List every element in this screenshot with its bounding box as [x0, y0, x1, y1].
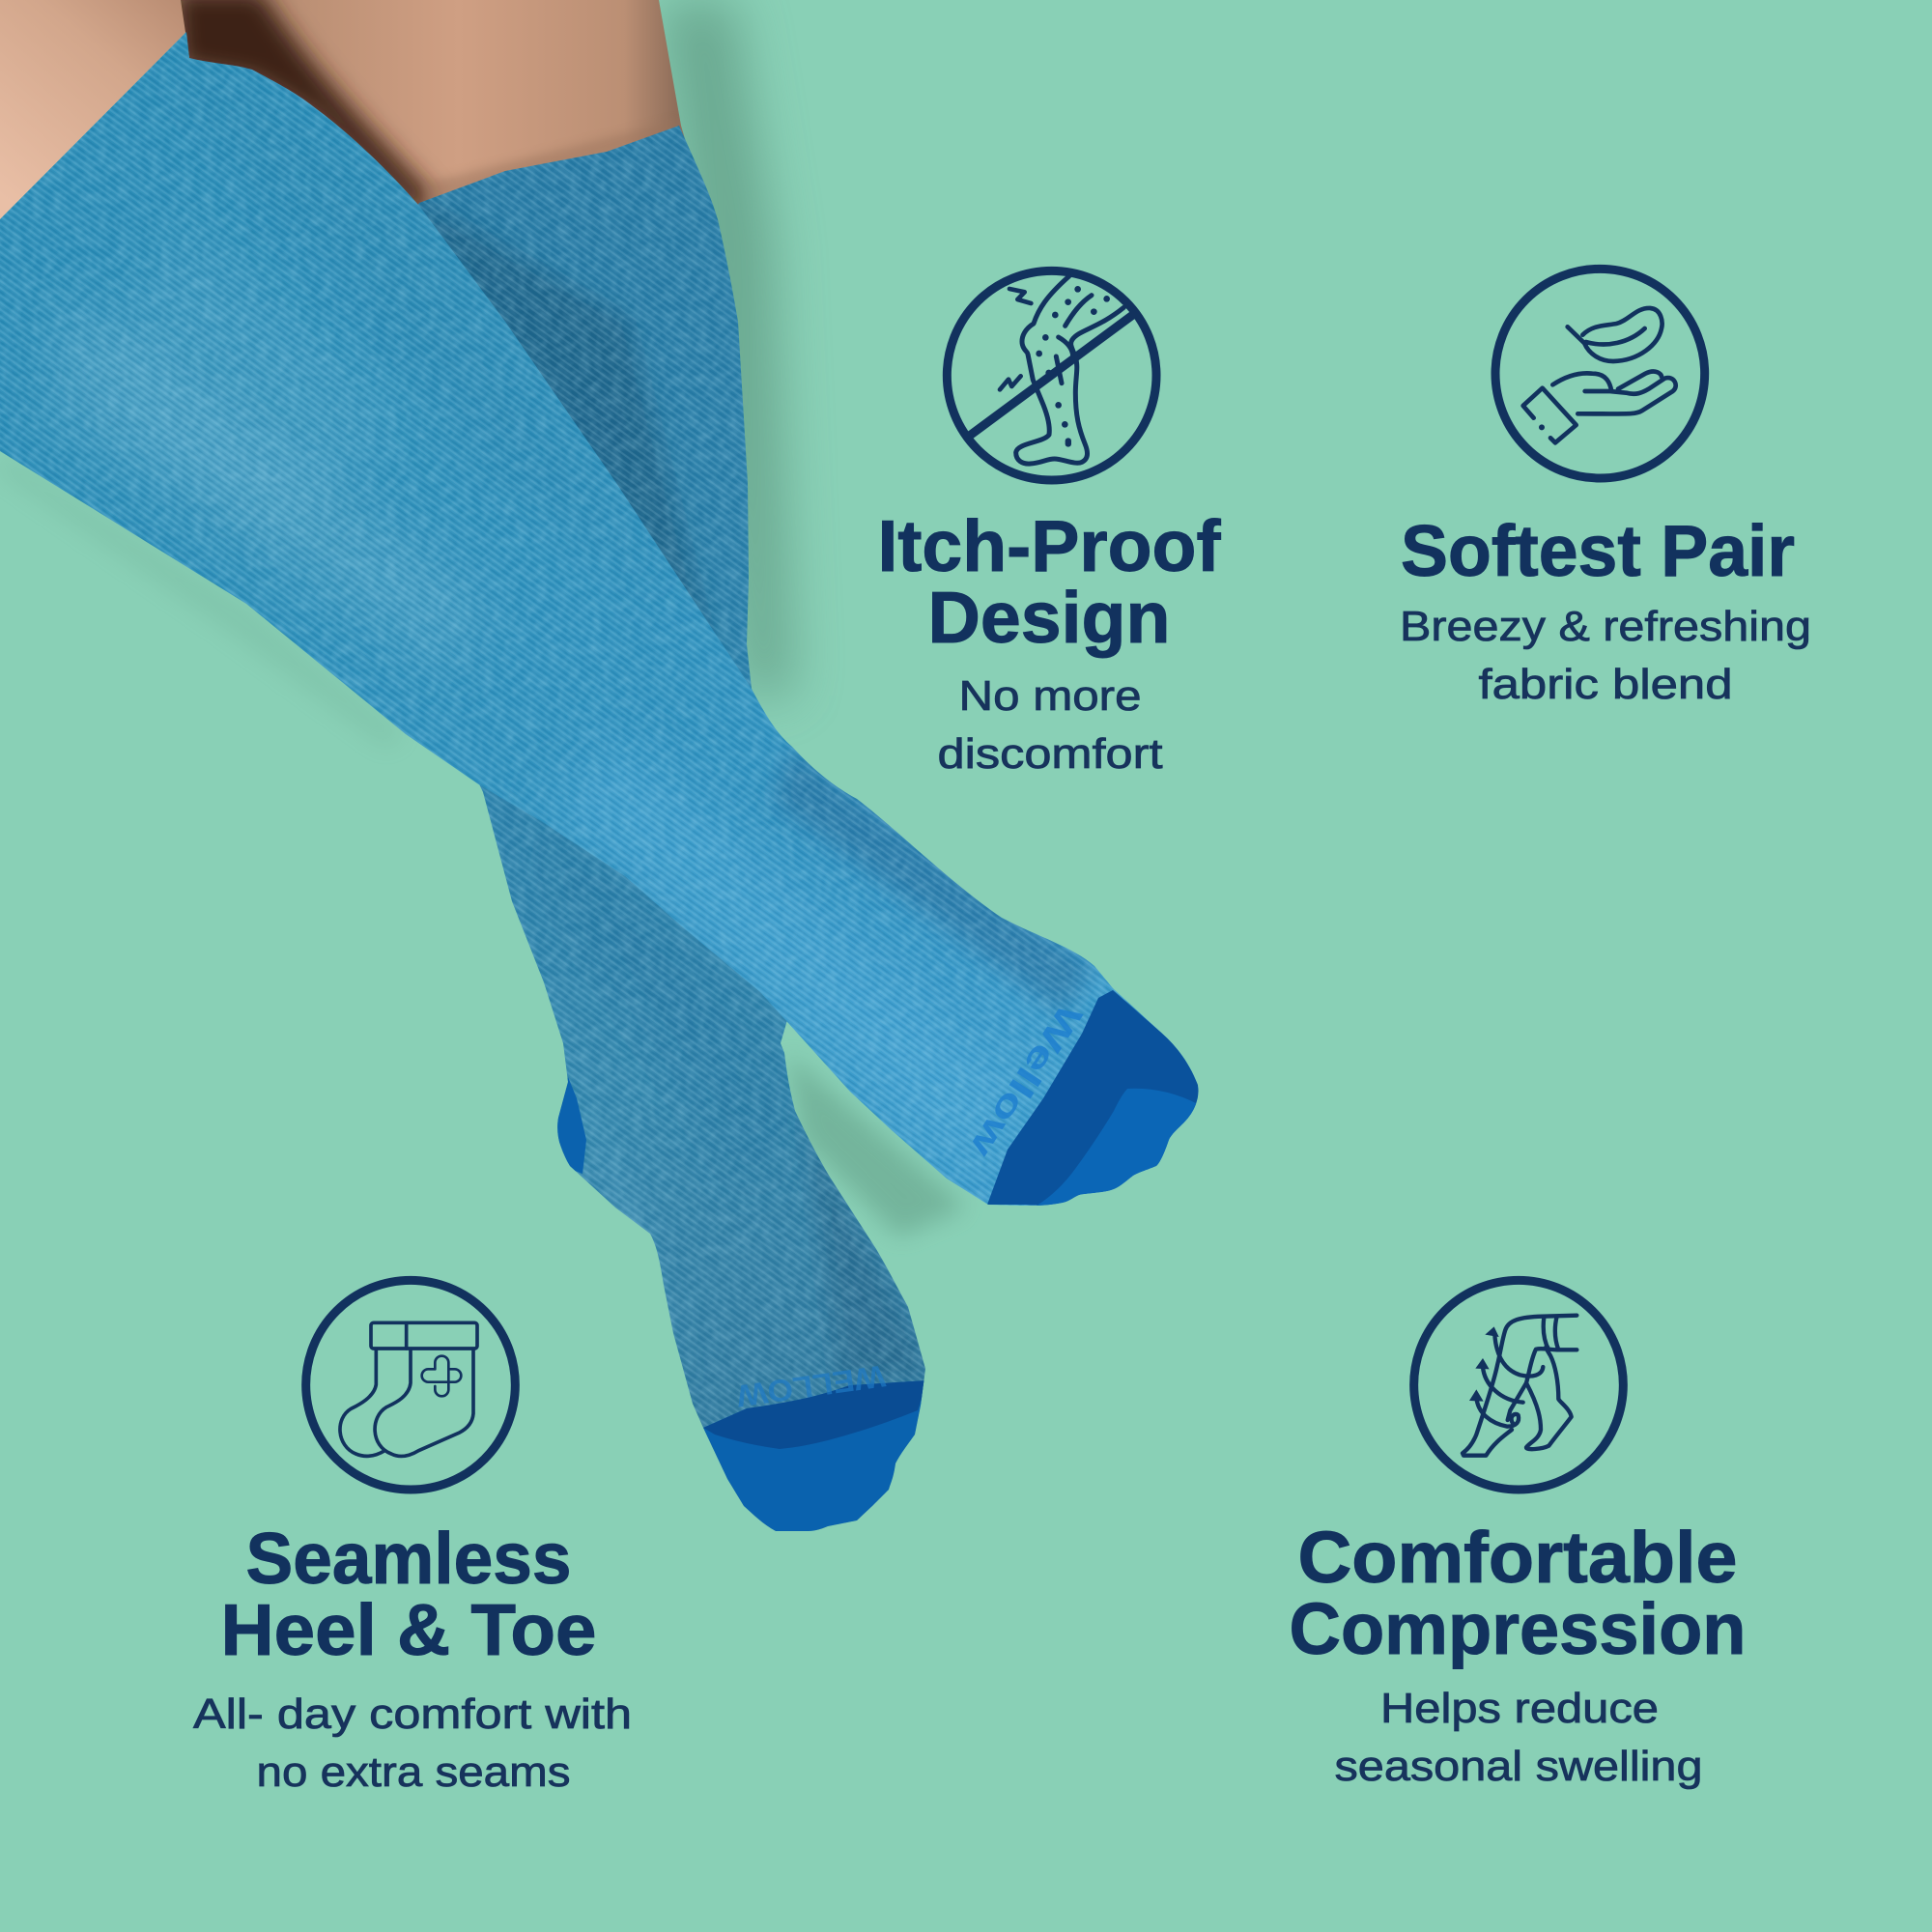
back sock toe: [703, 1380, 927, 1531]
front sock: [0, 19, 1217, 1217]
panel: itch-proof design: [877, 270, 1222, 778]
description: No more: [958, 672, 1142, 720]
back sock: [417, 126, 925, 1531]
description: no extra seams: [257, 1748, 570, 1796]
heading: Softest Pair: [1401, 510, 1795, 591]
heading: Design: [927, 577, 1171, 658]
icon: legs with compression arrows: [1414, 1280, 1623, 1490]
description: Helps reduce: [1380, 1685, 1659, 1732]
description: seasonal swelling: [1335, 1743, 1702, 1790]
icon: itchy leg crossed out: [947, 270, 1156, 480]
heel patch: [557, 1077, 586, 1174]
shadows on the background: [0, 0, 966, 1236]
icon: hand and feather: [1495, 269, 1705, 478]
photo: crossed legs in blue compression socks: [0, 0, 1217, 1546]
logo on front sock: Wellow: [961, 997, 1091, 1166]
description: Breezy & refreshing: [1400, 603, 1811, 650]
skin: right thigh: [181, 0, 685, 205]
heading: Heel & Toe: [220, 1589, 597, 1670]
description: fabric blend: [1478, 661, 1733, 708]
panel: softest pair: [1400, 269, 1811, 708]
front sock toe: [987, 990, 1199, 1206]
heading: Compression: [1289, 1588, 1747, 1669]
description: All- day comfort with: [193, 1690, 632, 1738]
skin: left thigh: [0, 0, 186, 219]
description: discomfort: [937, 730, 1163, 778]
heading: Seamless: [245, 1518, 572, 1599]
panel: seamless heel and toe: [193, 1280, 632, 1796]
logo on back sock: WELLOW: [733, 1358, 888, 1414]
heading: Comfortable: [1298, 1517, 1737, 1598]
heading: Itch-Proof: [877, 505, 1222, 586]
panel: comfortable compression: [1289, 1280, 1747, 1790]
icon: pair of socks: [306, 1280, 515, 1490]
